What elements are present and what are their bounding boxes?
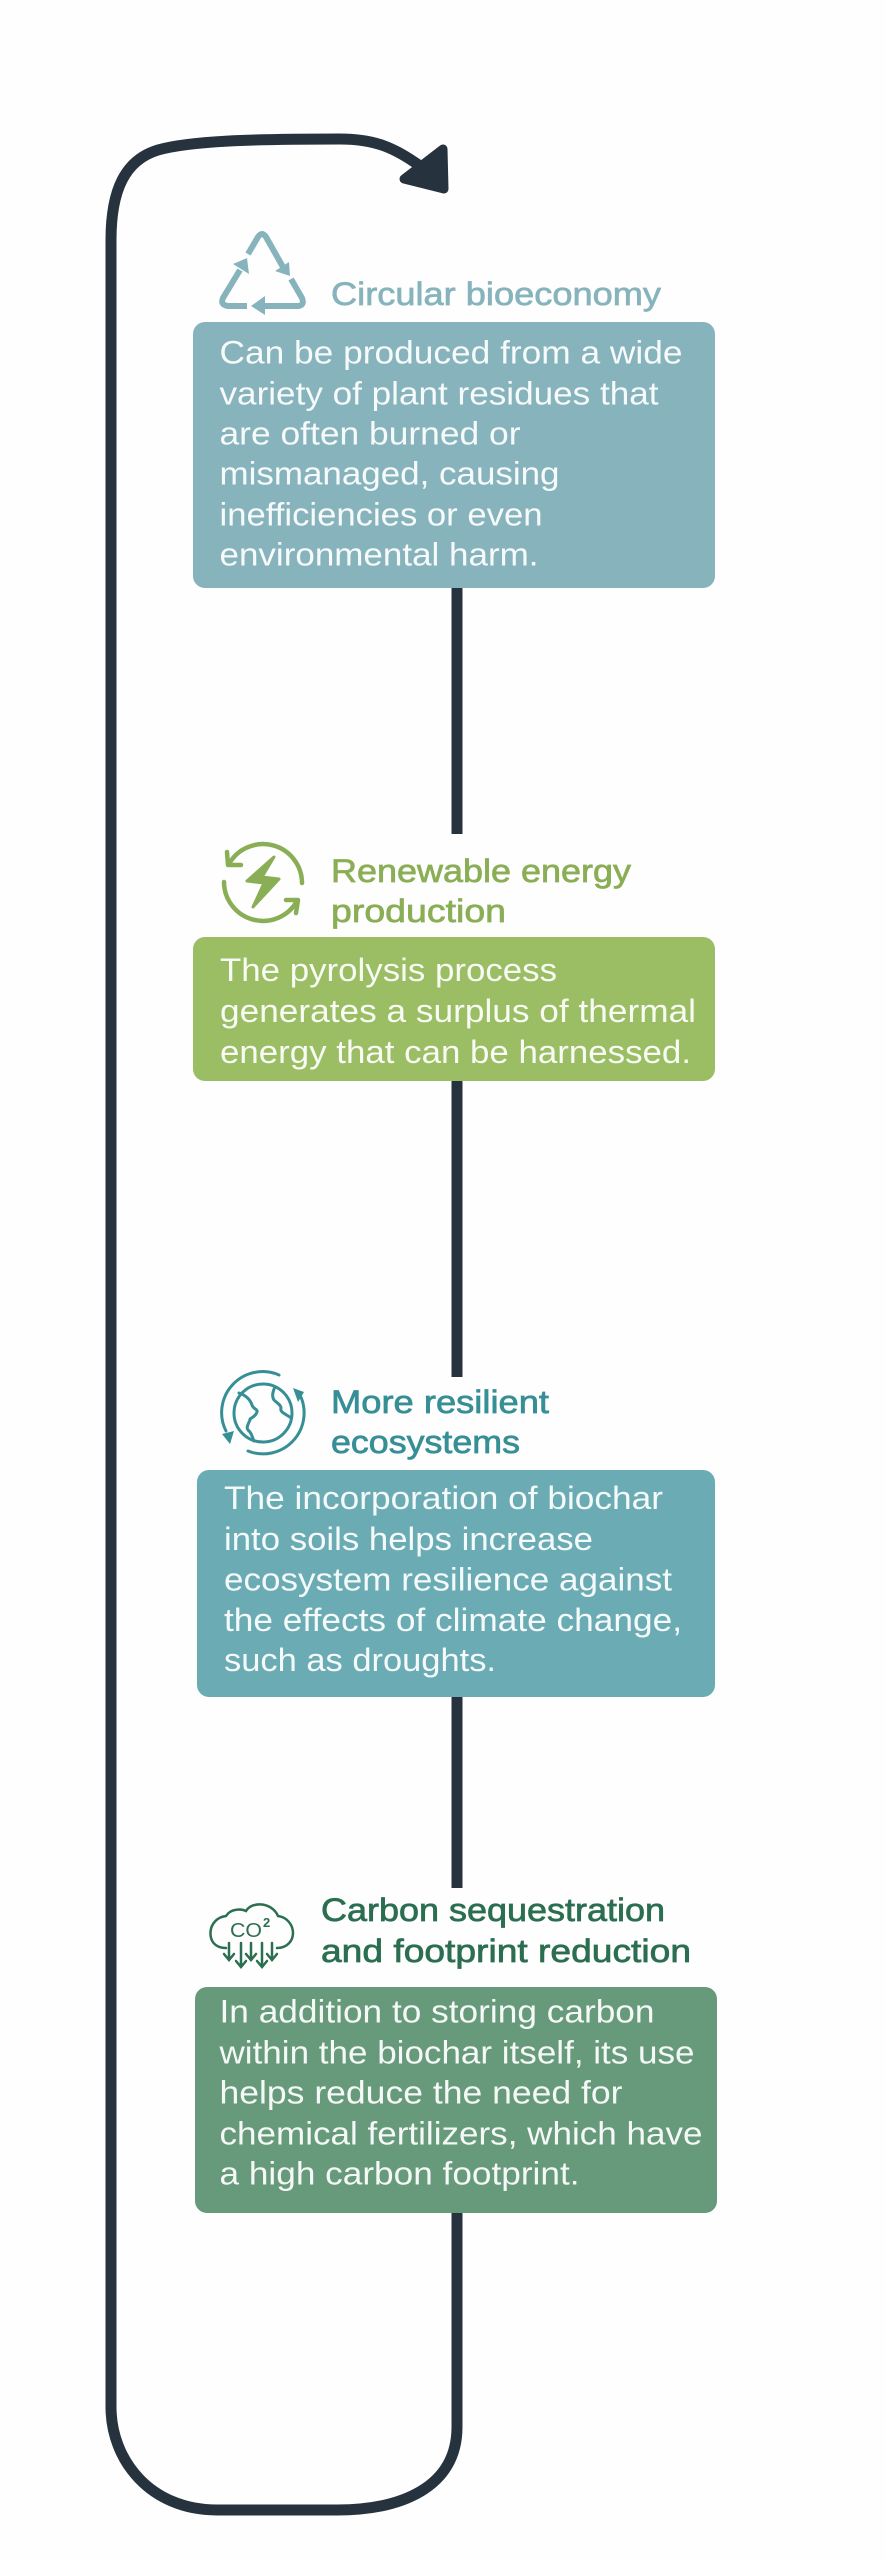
heading: Renewable energy production: Renewable energy [331, 853, 631, 889]
text box: renewable energy [193, 937, 715, 1081]
text box: carbon sequestration: helps reduce the need for [220, 2074, 623, 2110]
text box: circular bioeconomy [193, 322, 715, 588]
text box: circular bioeconomy: inefficiencies or even [220, 496, 542, 532]
icon: CO2 cloud with down arrows [210, 1904, 293, 1967]
heading: Carbon sequestration and footprint reduction: and footprint reduction [321, 1933, 691, 1969]
text box: circular bioeconomy: mismanaged, causing [220, 456, 560, 492]
heading: Carbon sequestration and footprint reduction: Carbon sequestration [321, 1892, 665, 1928]
text box: resilient ecosystems [197, 1470, 715, 1697]
text box: renewable energy: energy that can be harnessed. [220, 1034, 691, 1070]
icon: globe with arrows [222, 1372, 304, 1454]
icon: CO2 cloud with down arrows: 2 [263, 1915, 270, 1930]
text box: renewable energy: The pyrolysis process [220, 952, 557, 988]
text box: carbon sequestration [195, 1987, 717, 2213]
icon: CO2 cloud with down arrows: CO [230, 1920, 262, 1942]
text box: renewable energy: generates a surplus of thermal [220, 993, 696, 1029]
panel: carbon sequestration [195, 1892, 717, 2213]
heading: More resilient ecosystems [331, 1384, 549, 1460]
heading: More resilient ecosystems: ecosystems [331, 1424, 520, 1460]
heading: Renewable energy production: production [331, 893, 506, 929]
heading: Carbon sequestration and footprint reduction [321, 1892, 691, 1969]
panel: circular bioeconomy [193, 234, 715, 588]
panel: renewable energy production [193, 844, 715, 1081]
text box: carbon sequestration: chemical fertilizers, which have [220, 2116, 702, 2152]
text box: resilient ecosystems: into soils helps increase [224, 1521, 593, 1557]
heading: Circular bioeconomy: Circular bioeconomy [331, 276, 661, 312]
heading: Renewable energy production [331, 853, 631, 929]
text box: resilient ecosystems: such as droughts. [224, 1642, 496, 1678]
icon: renewable energy bolt [224, 844, 302, 921]
text box: carbon sequestration: In addition to storing carbon [220, 1994, 654, 2030]
icon: recycling triangle [222, 234, 303, 315]
panel: more resilient ecosystems [197, 1372, 715, 1697]
text box: resilient ecosystems: the effects of climate change, [224, 1602, 682, 1638]
heading: More resilient ecosystems: More resilient [331, 1384, 549, 1420]
cycle loop arrow [111, 139, 457, 2510]
text box: circular bioeconomy: variety of plant residues that [220, 376, 659, 412]
text box: resilient ecosystems: The incorporation of biochar [224, 1480, 663, 1516]
text box: circular bioeconomy: environmental harm. [220, 536, 538, 572]
text box: resilient ecosystems: ecosystem resilience against [224, 1562, 672, 1598]
text box: carbon sequestration: a high carbon footprint. [220, 2156, 580, 2192]
text box: circular bioeconomy: Can be produced from a wide [220, 334, 682, 370]
text box: carbon sequestration: within the biochar itself, its use [218, 2034, 694, 2070]
text box: circular bioeconomy: are often burned or [220, 416, 521, 452]
